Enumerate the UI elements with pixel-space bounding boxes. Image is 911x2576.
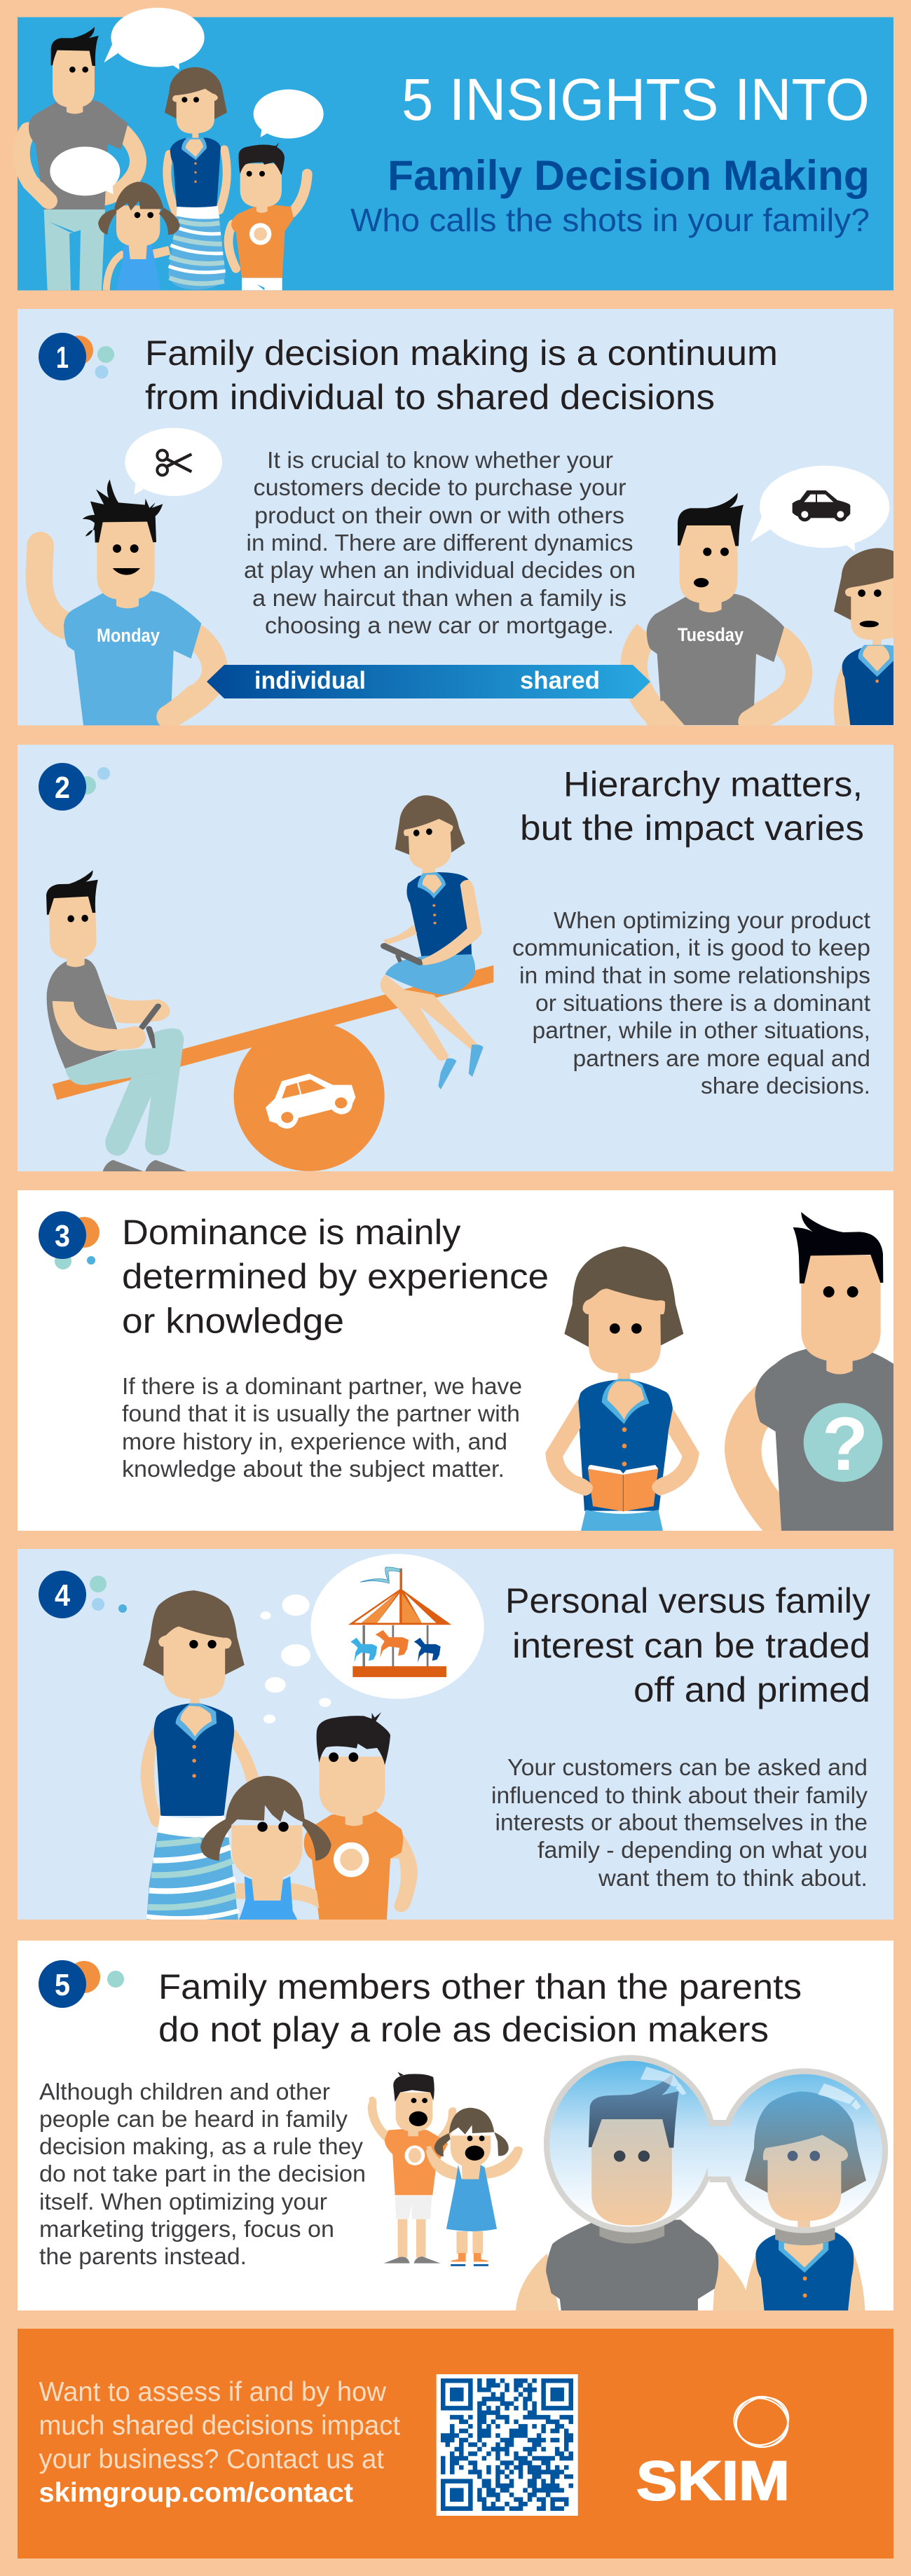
body text: partner, while in other situations, bbox=[533, 1017, 870, 1043]
subtitle: Family Decision Making bbox=[388, 152, 870, 199]
panel: insight 2 bbox=[18, 745, 893, 1172]
panel: footer call to action bbox=[18, 2329, 893, 2558]
illustration: family thinking about a carousel bbox=[141, 1554, 484, 1920]
body text: knowledge about the subject matter. bbox=[122, 1456, 505, 1482]
badge: number 5 bbox=[39, 1960, 124, 2008]
QR code bbox=[437, 2374, 578, 2516]
heading bbox=[520, 765, 864, 848]
heading: off and primed bbox=[633, 1670, 870, 1709]
body text bbox=[39, 2079, 366, 2269]
heading bbox=[158, 1967, 802, 2049]
body text: customers decide to purchase your bbox=[254, 474, 626, 500]
call to action text: skimgroup.com/contact bbox=[39, 2478, 353, 2508]
panel: header bbox=[18, 8, 893, 291]
body text: interests or about themselves in the bbox=[495, 1809, 868, 1835]
body text: at play when an individual decides on bbox=[244, 557, 636, 583]
binoculars bbox=[544, 2055, 888, 2233]
icon: question mark: ? bbox=[822, 1401, 868, 1486]
panel: insight 1 bbox=[18, 309, 893, 731]
arrow: individual to shared continuum bbox=[207, 665, 650, 698]
heading bbox=[122, 1213, 549, 1341]
body text: itself. When optimizing your bbox=[39, 2189, 327, 2215]
badge: number 3 bbox=[39, 1211, 100, 1269]
heading: from individual to shared decisions bbox=[145, 378, 715, 417]
panel: insight 4 bbox=[18, 1549, 893, 1920]
arrow: individual to shared continuum: individual bbox=[254, 667, 366, 694]
call to action text: your business? Contact us at bbox=[39, 2444, 384, 2474]
title: 5 INSIGHTS INTO bbox=[402, 67, 870, 132]
woman reading a book bbox=[545, 1246, 699, 1531]
heading: Family decision making is a continuum bbox=[145, 333, 778, 373]
body text: decision making, as a rule they bbox=[39, 2133, 364, 2159]
body text: Your customers can be asked and bbox=[507, 1754, 868, 1780]
speech bubbles bbox=[50, 8, 324, 195]
body text bbox=[122, 1373, 522, 1482]
man with question mark shirt bbox=[725, 1212, 893, 1531]
heading: or knowledge bbox=[122, 1302, 344, 1341]
badge: number 4: 4 bbox=[55, 1578, 70, 1613]
badge: number 2: 2 bbox=[55, 771, 70, 805]
body text: It is crucial to know whether your bbox=[267, 447, 613, 473]
heading: determined by experience bbox=[122, 1257, 549, 1296]
call to action text bbox=[39, 2377, 400, 2508]
icon: carousel bbox=[348, 1567, 451, 1677]
woman on seesaw bbox=[381, 795, 484, 1089]
badge: number 3: 3 bbox=[55, 1219, 70, 1253]
body text: do not take part in the decision bbox=[39, 2161, 366, 2186]
woman cropped at edge bbox=[834, 548, 893, 725]
body text: in mind that in some relationships bbox=[519, 963, 870, 988]
man on seesaw bbox=[46, 870, 189, 1172]
panel: insight 3 bbox=[18, 1190, 893, 1531]
badge: number 1 bbox=[39, 333, 114, 380]
illustration: woman with book and man with question mark bbox=[545, 1212, 893, 1531]
body text: want them to think about. bbox=[598, 1865, 868, 1891]
body text: found that it is usually the partner with bbox=[122, 1400, 520, 1426]
speech bubble with car bbox=[751, 466, 889, 551]
heading: Personal versus family bbox=[505, 1581, 870, 1620]
body text: marketing triggers, focus on bbox=[39, 2216, 334, 2242]
figure: Tuesday man with car bubble and woman bbox=[634, 466, 893, 731]
heading bbox=[145, 333, 778, 417]
body text: If there is a dominant partner, we have bbox=[122, 1373, 522, 1399]
illustration: family with speech bubbles bbox=[21, 8, 324, 290]
heading: but the impact varies bbox=[520, 808, 864, 848]
badge: number 2 bbox=[39, 763, 110, 811]
badge: number 1: 1 bbox=[56, 340, 69, 375]
speech bubble with scissors bbox=[125, 428, 222, 496]
body text: share decisions. bbox=[701, 1073, 870, 1098]
call to action text: much shared decisions impact bbox=[39, 2411, 400, 2441]
body text: people can be heard in family bbox=[39, 2106, 348, 2132]
heading: Dominance is mainly bbox=[122, 1213, 461, 1252]
logo: SKIM: SKIM bbox=[636, 2449, 790, 2512]
t-shirt label: Tuesday: Tuesday bbox=[678, 624, 744, 645]
figure: son bbox=[228, 142, 307, 290]
body text bbox=[491, 1754, 868, 1891]
badge: number 4 bbox=[39, 1571, 127, 1618]
body text bbox=[244, 447, 636, 638]
figure: Monday man with scissors bubble bbox=[39, 428, 222, 725]
body text: in mind. There are different dynamics bbox=[247, 530, 633, 556]
body text: a new haircut than when a family is bbox=[252, 585, 626, 611]
call to action text: Want to assess if and by how bbox=[39, 2377, 387, 2407]
heading: do not play a role as decision makers bbox=[158, 2010, 769, 2049]
logo: SKIM bbox=[636, 2389, 796, 2512]
body text: more history in, experience with, and bbox=[122, 1428, 507, 1454]
body text: family - depending on what you bbox=[537, 1837, 868, 1863]
tagline: Who calls the shots in your family? bbox=[350, 202, 870, 238]
body text: product on their own or with others bbox=[254, 502, 624, 528]
daughter bbox=[200, 1776, 331, 1920]
figure: mother bbox=[165, 67, 227, 289]
body text: partners are more equal and bbox=[573, 1045, 870, 1071]
boy shouting bbox=[368, 2072, 456, 2264]
body text: choosing a new car or mortgage. bbox=[265, 612, 614, 638]
heading: Family members other than the parents bbox=[158, 1967, 802, 2006]
thought bubble bbox=[260, 1554, 484, 1723]
body text: the parents instead. bbox=[39, 2243, 247, 2269]
heading: interest can be traded bbox=[512, 1626, 870, 1665]
t-shirt label: Monday: Monday bbox=[97, 625, 160, 646]
seesaw bbox=[53, 965, 493, 1171]
body text: When optimizing your product bbox=[554, 907, 870, 933]
illustration: shouting children and parents in binoculars bbox=[368, 2055, 888, 2310]
son bbox=[304, 1712, 418, 1920]
girl shouting bbox=[426, 2108, 523, 2266]
body text: influenced to think about their family bbox=[491, 1782, 868, 1808]
badge: number 5: 5 bbox=[55, 1968, 70, 2002]
illustration: seesaw with man, woman and car bbox=[46, 795, 493, 1172]
body text: Although children and other bbox=[39, 2079, 330, 2105]
mother bbox=[141, 1590, 259, 1920]
body text bbox=[512, 907, 870, 1098]
body text: or situations there is a dominant bbox=[535, 990, 870, 1016]
parents' bodies bbox=[516, 2219, 865, 2310]
figure: daughter bbox=[98, 181, 180, 290]
heading bbox=[505, 1581, 870, 1709]
body text: communication, it is good to keep bbox=[512, 935, 870, 960]
panel: insight 5 bbox=[18, 1941, 893, 2310]
figure: father bbox=[21, 27, 138, 290]
heading: Hierarchy matters, bbox=[563, 765, 863, 804]
arrow: individual to shared continuum: shared bbox=[520, 667, 600, 694]
